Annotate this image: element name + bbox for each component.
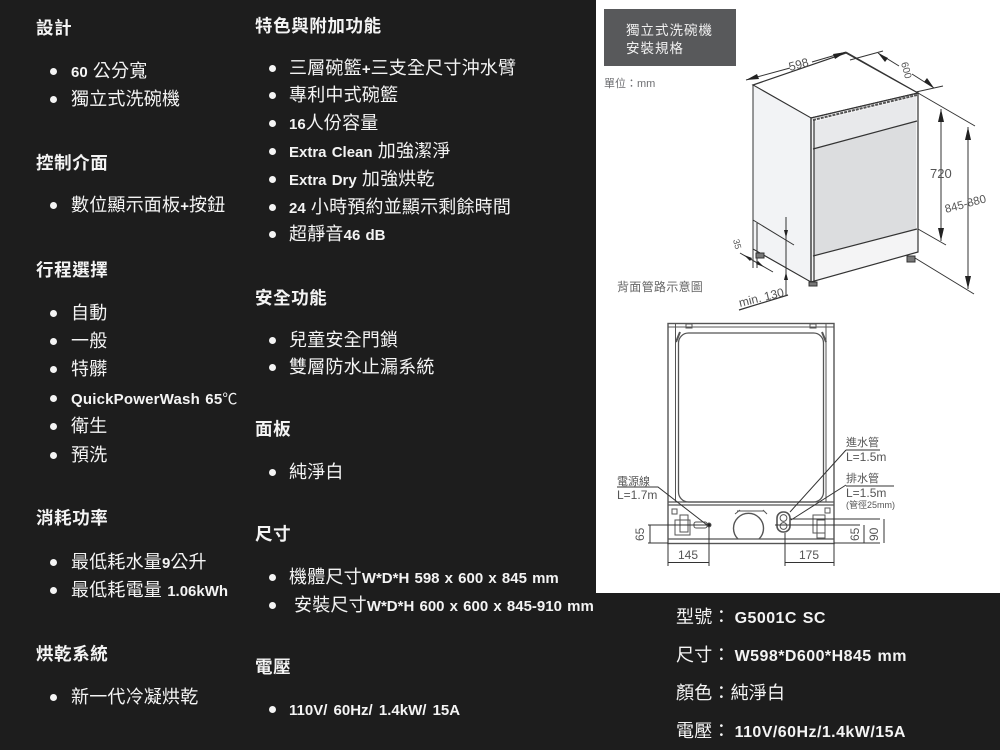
label box: installation specs: [604, 9, 736, 66]
model number: 型號：G5001C SC: [676, 607, 826, 627]
dimension labels: 845-880: [944, 193, 988, 216]
dimension labels: 720: [930, 166, 952, 181]
rear view labels: 65: [848, 527, 862, 541]
list: programs: 一般: [71, 331, 107, 351]
panel: model summary: [676, 607, 907, 741]
leader lines: [617, 450, 846, 525]
list: features: Extra Clean 加強潔淨: [289, 141, 451, 161]
label box: installation specs: 安裝規格: [626, 41, 684, 56]
rear view labels: 145: [678, 548, 698, 562]
heading: consumption: 消耗功率: [36, 508, 108, 528]
unit note: 單位：mm: [604, 76, 655, 90]
list: safety: [269, 330, 435, 377]
list: features: [269, 58, 516, 244]
diagram: rear view piping: [617, 324, 894, 566]
list: dimensions: 安裝尺寸W*D*H 600 x 600 x 845-910 mm: [294, 595, 594, 615]
list: design: 獨立式洗碗機: [71, 89, 180, 109]
voltage: 電壓：110V/60Hz/1.4kW/15A: [676, 721, 906, 741]
heading: features: 特色與附加功能: [255, 16, 382, 36]
rear view labels: 進水管: [846, 435, 879, 449]
panel: middle specification column: [255, 16, 594, 719]
rear view labels: L=1.5m: [846, 450, 886, 464]
list: dimensions: 機體尺寸W*D*H 598 x 600 x 845 mm: [289, 567, 559, 587]
rear view labels: 電源線: [617, 474, 650, 488]
panel: left specification column: [36, 18, 238, 707]
list: programs: 特髒: [71, 359, 107, 379]
dimension labels: 598: [787, 55, 810, 74]
list: consumption: 最低耗電量 1.06kWh: [71, 580, 228, 600]
heading: design: 設計: [36, 18, 72, 38]
list: voltage: 110V/ 60Hz/ 1.4kW/ 15A: [289, 702, 460, 719]
dimension labels: [731, 55, 988, 310]
list: programs: [50, 303, 238, 465]
list: consumption: 最低耗水量9公升: [71, 552, 207, 572]
list: dimensions: [269, 567, 594, 615]
list: programs: 自動: [71, 303, 107, 323]
list: safety: 雙層防水止漏系統: [289, 357, 435, 377]
list: features: 16人份容量: [289, 113, 378, 133]
dimension lines: [746, 52, 975, 294]
rear view labels: 排水管: [846, 471, 879, 485]
rear view labels: L=1.5m: [846, 486, 886, 500]
list: panel finish: 純淨白: [289, 462, 344, 482]
list: control panel: 數位顯示面板+按鈕: [71, 195, 225, 215]
diagram: isometric dishwasher: [739, 51, 975, 310]
list: safety: 兒童安全門鎖: [289, 330, 398, 350]
list: features: Extra Dry 加強烘乾: [289, 169, 435, 189]
rear view labels: 175: [799, 548, 819, 562]
heading: panel finish: 面板: [255, 419, 291, 439]
heading: voltage: 電壓: [255, 657, 291, 677]
list: drying system: 新一代冷凝烘乾: [71, 687, 198, 707]
list: design: 60 公分寬: [71, 61, 148, 81]
rear view labels: 90: [867, 527, 881, 541]
list: programs: QuickPowerWash 65℃: [71, 391, 238, 408]
rear view labels: L=1.7m: [617, 488, 657, 502]
list: features: 專利中式碗籃: [289, 85, 398, 105]
heading: programs: 行程選擇: [36, 260, 108, 280]
dimension labels: 35: [731, 238, 743, 250]
rear view labels: [617, 435, 895, 562]
list: consumption: [50, 552, 228, 600]
heading: dimensions: 尺寸: [255, 524, 291, 544]
rear view labels: 65: [633, 527, 647, 541]
list: features: 24 小時預約並顯示剩餘時間: [289, 197, 511, 217]
heading: drying system: 烘乾系統: [36, 644, 108, 664]
rear view labels: (管徑25mm): [846, 499, 895, 510]
caption: rear piping diagram: 背面管路示意圖: [617, 279, 703, 294]
list: programs: 衛生: [71, 416, 107, 436]
dimension labels: 600: [898, 61, 913, 80]
heading: safety: 安全功能: [255, 288, 327, 308]
label box: installation specs: 獨立式洗碗機: [626, 23, 713, 38]
size: 尺寸：W598*D600*H845 mm: [676, 645, 907, 665]
list: features: 三層碗籃+三支全尺寸沖水臂: [289, 58, 516, 78]
list: programs: 預洗: [71, 445, 107, 465]
dimension labels: min. 130: [737, 285, 786, 310]
list: features: 超靜音46 dB: [289, 224, 385, 244]
color: 顏色：純淨白: [676, 683, 785, 703]
heading: control panel: 控制介面: [36, 153, 108, 173]
list: design: [50, 61, 180, 109]
